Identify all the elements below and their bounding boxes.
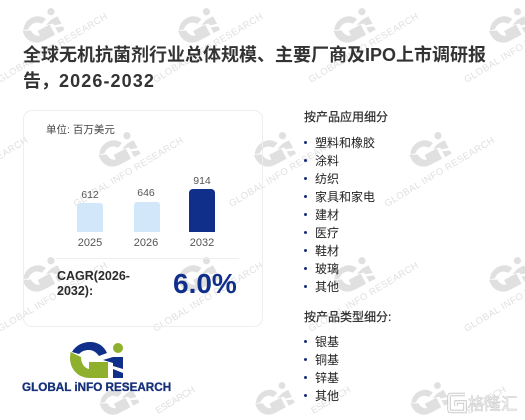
item: 家具和家电 xyxy=(315,190,375,204)
source watermark: Gelonghui: 格隆汇 xyxy=(468,394,518,414)
item: 其他 xyxy=(315,388,339,402)
year label 2025: 2025 xyxy=(78,236,102,248)
item: 鞋材 xyxy=(315,244,339,258)
item: 其他 xyxy=(315,280,339,294)
panel: market size card xyxy=(23,110,263,327)
watermark pattern: GLOBAL INFO RESEARCH xyxy=(227,135,341,210)
list: types xyxy=(304,334,339,402)
item: 玻璃 xyxy=(315,262,339,276)
year label 2026: 2026 xyxy=(134,236,158,248)
value label 2026: 646 xyxy=(137,187,155,199)
value label 2032: 914 xyxy=(193,175,211,187)
watermark pattern: GLOBAL INFO RESEARCH xyxy=(151,11,265,86)
watermark pattern: ESEARCH xyxy=(465,384,508,417)
watermark pattern: GLOBAL INFO RESEARCH xyxy=(72,135,186,210)
CAGR label: CAGR(2026- xyxy=(57,269,130,283)
item: 银基 xyxy=(315,334,339,348)
watermark pattern: GLOBAL INFO RESEARCH xyxy=(307,260,421,335)
icon: Gi mark xyxy=(70,342,123,378)
item: 塑料和橡胶 xyxy=(315,136,375,150)
bar chart xyxy=(77,175,215,248)
year label 2032: 2032 xyxy=(190,236,214,248)
item: 建材 xyxy=(315,208,339,222)
CAGR label xyxy=(57,269,130,298)
item: 涂料 xyxy=(315,154,339,168)
logo wordmark: GLOBAL iNFO RESEARCH xyxy=(22,381,171,394)
watermark pattern: GLOBAL INFO RESEARCH xyxy=(383,135,497,210)
title: 告，2026-2032 xyxy=(23,71,155,91)
divider xyxy=(56,258,239,259)
bar 2025 xyxy=(77,203,103,232)
unit label: 单位: 百万美元 xyxy=(46,124,115,136)
title: 全球无机抗菌剂行业总体规模、主要厂商及IPO上市调研报 xyxy=(23,45,486,65)
CAGR label: 2032): xyxy=(57,284,93,298)
watermark pattern: ESEARCH xyxy=(154,384,197,417)
watermark pattern: ESEARCH xyxy=(309,384,353,417)
heading: by type: 按产品类型细分: xyxy=(304,310,391,324)
watermark pattern: GLOBAL INFO RESEARCH xyxy=(307,11,421,86)
item: 纺织 xyxy=(315,172,339,186)
heading: by application: 按产品应用细分 xyxy=(304,110,388,124)
logo: Global Info Research xyxy=(22,342,171,394)
bar 2026 xyxy=(134,202,160,232)
value label 2025: 612 xyxy=(81,189,99,201)
title xyxy=(23,45,486,91)
item: 锌基 xyxy=(315,370,339,384)
item: 医疗 xyxy=(315,226,339,240)
source watermark: Gelonghui xyxy=(447,392,518,414)
list: applications xyxy=(304,136,375,294)
item: 铜基 xyxy=(315,352,339,366)
CAGR value: 6.0% xyxy=(173,268,237,299)
watermark pattern: GLOBAL INFO RESEARCH xyxy=(151,260,265,335)
bar 2032 xyxy=(189,189,215,232)
